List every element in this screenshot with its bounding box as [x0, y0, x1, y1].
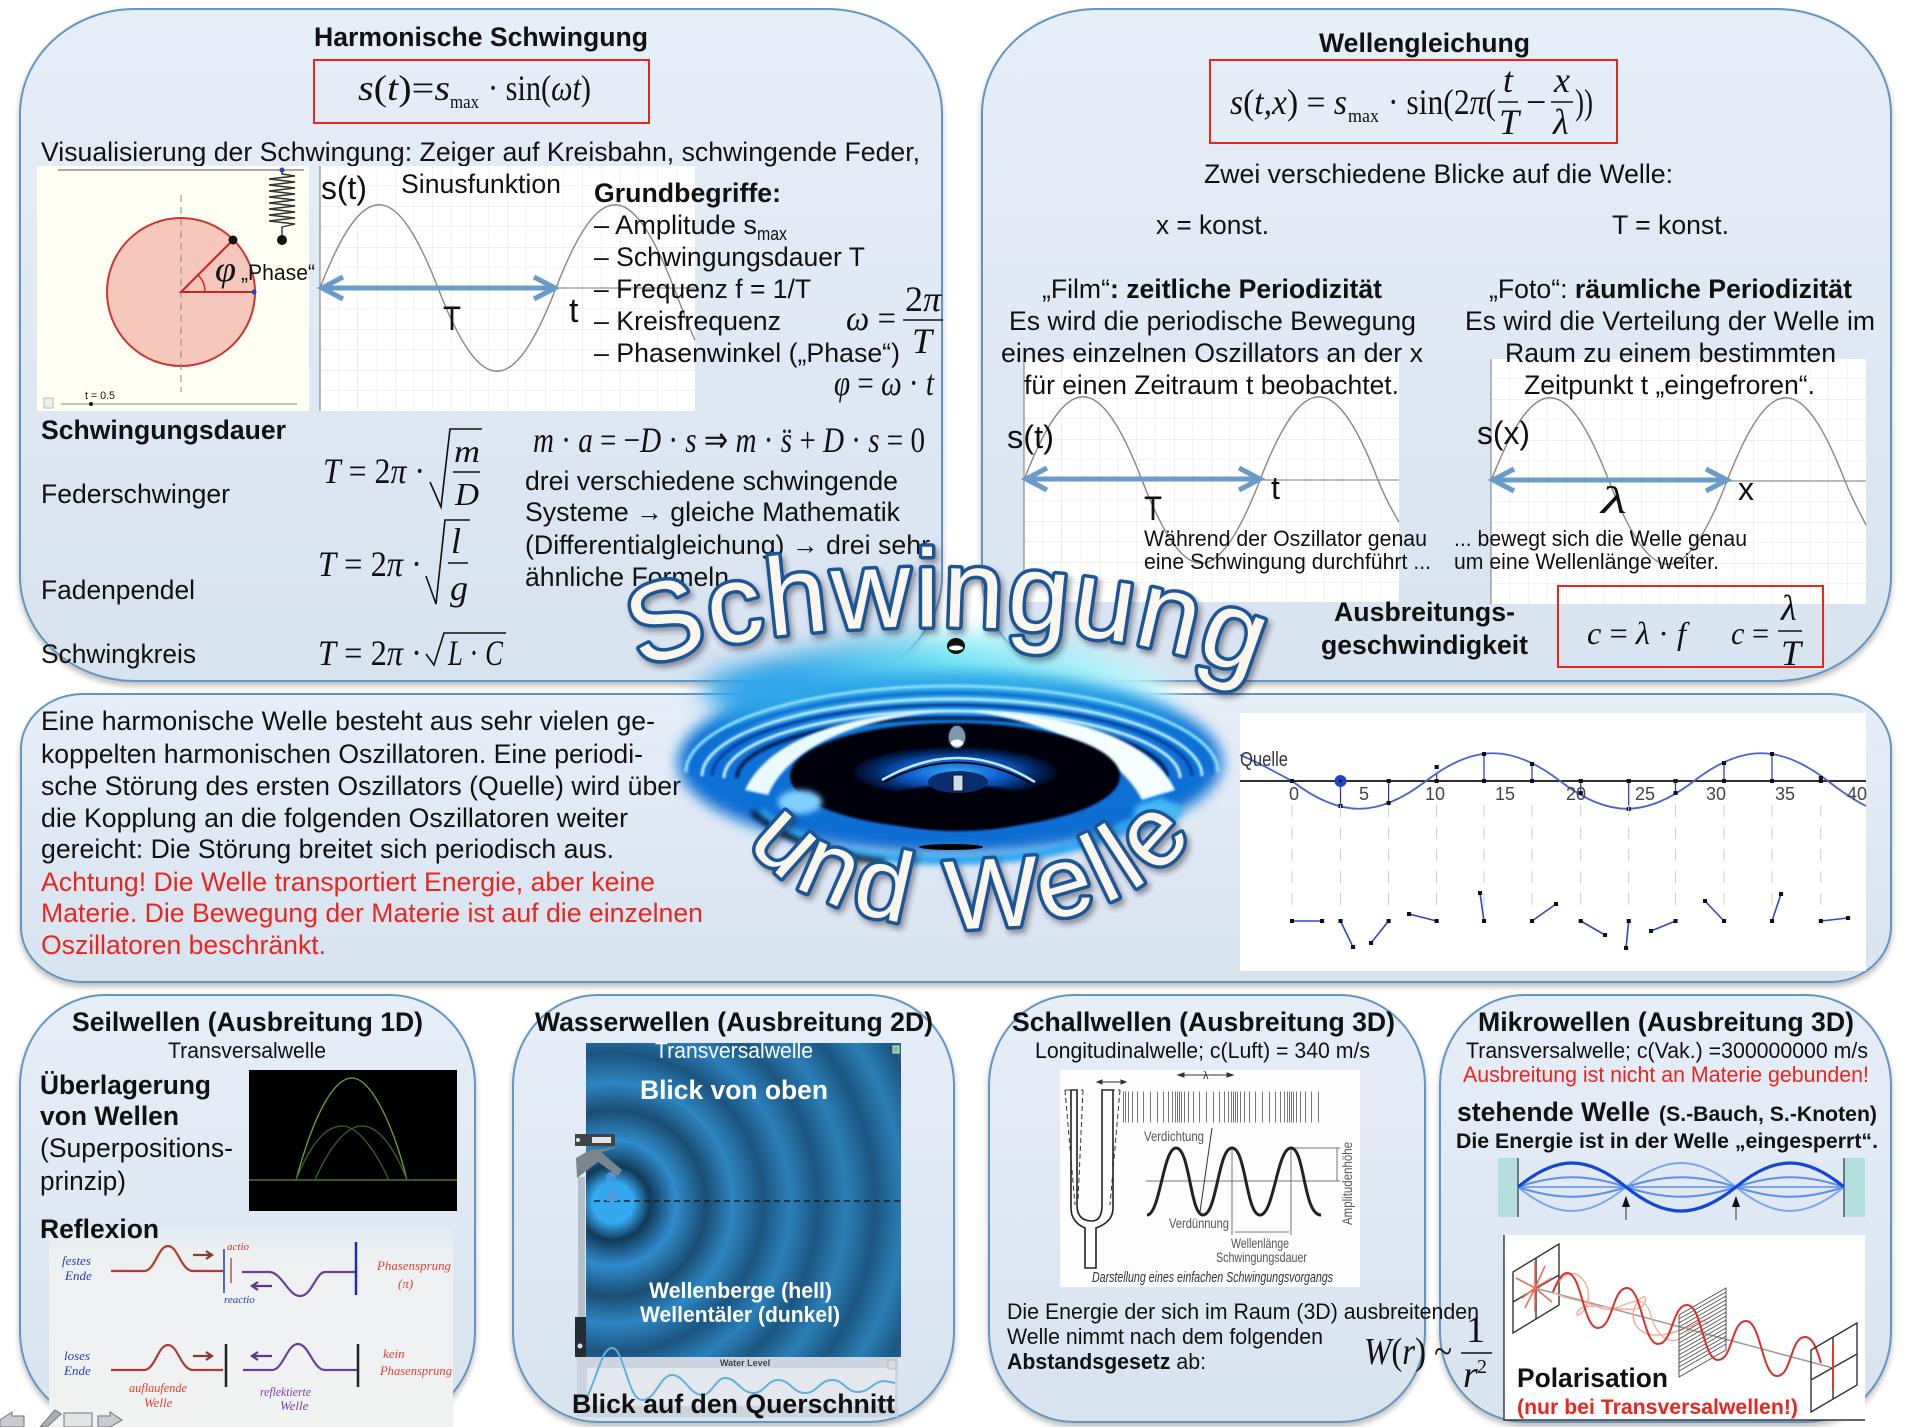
warning text: Ausbreitung ist nicht an Materie gebunden!: [1463, 1062, 1869, 1087]
text block: inverse square law: Welle nimmt nach dem folgenden: [1007, 1324, 1323, 1349]
formula box: wave speed: c =: [1731, 615, 1769, 651]
chart: wave in space: [1491, 359, 1866, 604]
chart: sine function: Sinusfunktion: [401, 169, 561, 199]
text block: superposition: (Superpositions-: [40, 1133, 233, 1163]
diagram: hand-drawn reflection: kein: [383, 1346, 405, 1361]
axis labels: photo chart: x: [1738, 471, 1754, 507]
diagram: hand-drawn reflection: Welle: [280, 1398, 309, 1413]
row: free end: [111, 1344, 358, 1387]
text block: explanation: sche Störung des ersten Oszillators (Quelle) wird über: [41, 771, 681, 801]
panel: Schallwellen: [989, 995, 1425, 1422]
text: energy locked: Die Energie ist in der Welle „eingesperrt“.: [1456, 1130, 1878, 1153]
subheading: Transversalwelle; c(Vak.) =300000000 m/s: [1466, 1038, 1868, 1063]
text block: three systems: ähnliche Formeln: [525, 562, 729, 592]
panel: Wasserwellen: [513, 995, 954, 1422]
centre splash: [853, 747, 1057, 797]
chart: water level: Water Level: [720, 1358, 770, 1368]
heading: stehende Welle: (S.-Bauch, S.-Knoten): [1659, 1103, 1877, 1126]
heading: Schallwellen (Ausbreitung 3D): [1012, 1007, 1395, 1037]
axis labels: [1289, 784, 1867, 804]
icon: tuning fork: [1071, 1090, 1113, 1268]
title: und Welle: [751, 807, 1194, 940]
formula box: wave equation: [1210, 60, 1617, 143]
text block: three systems: (Differentialgleichung) → drei sehr: [525, 530, 930, 560]
diagram: rotating pointer and spring: φ: [215, 249, 236, 289]
axis labels: 10: [1425, 784, 1445, 804]
bright crescents: [745, 711, 945, 795]
diagram: hand-drawn reflection: (π): [398, 1276, 413, 1291]
text: visualisation intro: Visualisierung der Schwingung: Zeiger auf Kreisbahn, schwingende Feder,: [41, 137, 920, 167]
diagram: tuning fork and sound wave: λ: [1203, 1070, 1209, 1082]
simulation: ripple tank top view: [575, 1043, 901, 1357]
heading: Wasserwellen (Ausbreitung 2D): [535, 1007, 933, 1037]
formula: angular frequency: [846, 279, 943, 361]
text block: Grundbegriffe: – Kreisfrequenz: [594, 306, 781, 336]
axis labels: 40: [1847, 784, 1867, 804]
formula box: wave equation: max: [1348, 106, 1379, 127]
axis labels: photo chart: [1477, 415, 1754, 522]
formula: LC circuit period: L · C: [447, 633, 504, 673]
diagram: rotating pointer and spring: t = 0.5: [85, 390, 115, 402]
diagram: hand-drawn reflection: Ende: [63, 1363, 91, 1378]
chart: sine function: [320, 166, 695, 411]
heading: stehende Welle: stehende Welle: [1457, 1097, 1650, 1127]
text block: warning: Oszillatoren beschränkt.: [41, 930, 326, 960]
arrow: wavelength: [1493, 469, 1727, 491]
panel: Wellengleichung: [982, 9, 1891, 681]
icons: presentation controls: [0, 1410, 122, 1427]
droplets: [948, 725, 966, 749]
icon: spring: [269, 170, 295, 236]
caption: wave: ... bewegt sich die Welle genau: [1454, 526, 1747, 551]
chart: water level: [577, 1348, 898, 1417]
formula: spring period: D: [454, 476, 479, 512]
formula: spring period: [323, 429, 482, 512]
diagram: hand-drawn reflection: actio: [227, 1241, 249, 1253]
formula: angular frequency: 2π: [905, 279, 942, 319]
formula: spring period: m: [454, 433, 480, 469]
formula box: wave speed: c = λ · f: [1587, 615, 1690, 651]
formula: inverse square law: 2: [1477, 1356, 1487, 1378]
diagram: tuning fork and sound wave: Verdichtung: [1144, 1128, 1204, 1144]
formula: inverse square law: 1: [1466, 1309, 1485, 1351]
diagram: hand-drawn reflection: [49, 1228, 453, 1427]
caption: wave: [1454, 526, 1747, 574]
formula box: harmonic oscillation: max: [450, 92, 479, 113]
text block: superposition: Überlagerung: [40, 1070, 211, 1100]
label: crests and troughs: Wellenberge (hell): [649, 1278, 832, 1303]
formula: inverse square law: r: [1463, 1354, 1478, 1396]
diagram: rotating pointer and spring: „Phase“: [241, 260, 315, 285]
diagram: standing wave: [1498, 1158, 1865, 1220]
formula box: wave equation: −: [1526, 82, 1546, 122]
text block: Film: [1001, 274, 1423, 400]
axis labels: photo chart: s(x): [1477, 415, 1530, 451]
diagram: hand-drawn reflection: Phasensprung: [379, 1363, 452, 1378]
diagram: tuning fork and sound wave: [1060, 1070, 1360, 1287]
formula: inverse square law: [1364, 1309, 1492, 1396]
chart: sine function: T: [443, 300, 461, 338]
arrow: period T: [322, 277, 555, 299]
chart: sine function: s(t): [321, 170, 367, 206]
formula box: harmonic oscillation: [314, 60, 649, 123]
axis labels: 5: [1359, 784, 1369, 804]
text block: three systems: drei verschiedene schwingende: [525, 466, 898, 496]
formula: spring period: T = 2π ·: [323, 451, 425, 491]
diagram: tuning fork and sound wave: Wellenlänge: [1231, 1235, 1289, 1251]
text block: Foto: Raum zu einem bestimmten: [1505, 338, 1836, 368]
caption: oscillator: Während der Oszillator genau: [1144, 526, 1427, 551]
chart: coupled oscillators: Quelle: [1240, 749, 1288, 771]
panel: Harmonische Schwingung: [20, 9, 943, 681]
diagram: hand-drawn reflection: auflaufende: [129, 1380, 187, 1395]
icon: faucet: [576, 1147, 622, 1178]
chart: oscillator over time: [1024, 359, 1399, 602]
formula: inverse square law: W(r) ~: [1364, 1331, 1452, 1373]
formula box: wave equation: T: [1499, 102, 1522, 142]
text block: explanation: Eine harmonische Welle besteht aus sehr vielen ge-: [41, 706, 655, 736]
formula box: wave equation: )): [1575, 82, 1593, 122]
diagram: tuning fork and sound wave: Darstellung eines einfachen Schwingungsvorgangs: [1092, 1269, 1333, 1286]
diagram: hand-drawn reflection: loses: [64, 1348, 90, 1363]
text block: three systems: [525, 466, 930, 592]
diagram: hand-drawn reflection: reflektierte: [260, 1384, 311, 1399]
title: und Welle: und Welle: [751, 807, 1194, 940]
text block: Film: „Film“: zeitliche Periodizität: [1042, 274, 1382, 304]
text block: Foto: Es wird die Verteilung der Welle im: [1465, 306, 1875, 336]
label: x konstant: x = konst.: [1156, 210, 1269, 240]
formula: differential equation: m · a = −D · s ⇒ m · s̈ + D · s = 0: [533, 420, 925, 460]
formula box: wave equation: · sin(2π(: [1388, 82, 1496, 122]
text block: Grundbegriffe: – Schwingungsdauer T: [594, 242, 865, 272]
label: Blick auf den Querschnitt: Blick auf den Querschnitt: [572, 1389, 895, 1419]
label: T konstant: T = konst.: [1612, 210, 1729, 240]
heading: Schwingungsdauer: Schwingungsdauer: [41, 415, 286, 445]
panel: Seilwellen: [20, 995, 475, 1427]
caption: oscillator: [1144, 526, 1431, 574]
text block: explanation: gereicht: Die Störung breitet sich periodisch aus.: [41, 834, 614, 864]
text block: explanation: die Kopplung an die folgenden Oszillatoren weiter: [41, 803, 628, 833]
text block: Foto: [1465, 274, 1875, 400]
text block: inverse square law: [1007, 1299, 1479, 1374]
text block: warning: [41, 867, 703, 960]
text block: Grundbegriffe: [594, 178, 900, 368]
formula: phase: φ = ω · t: [834, 363, 935, 403]
formula: pendulum period: g: [450, 568, 468, 608]
subheading: Transversalwelle: [655, 1038, 813, 1063]
arrow: period: [1026, 468, 1260, 490]
text block: inverse square law: Die Energie der sich im Raum (3D) ausbreitenden: [1007, 1299, 1479, 1324]
label: Federschwinger: Federschwinger: [41, 479, 230, 509]
text block: superposition: [40, 1070, 233, 1196]
text block: Film: eines einzelnen Oszillators an der x: [1001, 338, 1423, 368]
axis labels: film chart: T: [1144, 490, 1162, 528]
label: crests and troughs: [640, 1278, 840, 1327]
text block: superposition: prinzip): [40, 1166, 126, 1196]
formula box: wave equation: t: [1503, 60, 1514, 100]
chart: coupled oscillators: [1240, 713, 1867, 971]
axis labels: film chart: t: [1271, 470, 1280, 506]
formula: angular frequency: T: [912, 321, 935, 361]
heading: Seilwellen (Ausbreitung 1D): [72, 1007, 423, 1037]
heading: Reflexion: Reflexion: [40, 1214, 159, 1244]
formula box: harmonic oscillation: · sin(ωt): [488, 68, 591, 108]
diagram: rotating pointer and spring: [37, 166, 315, 411]
diagram: tuning fork and sound wave: Schwingungsdauer: [1216, 1249, 1307, 1265]
axis labels: 20: [1566, 784, 1586, 804]
polarizer grid: [1679, 1288, 1726, 1377]
diagram: hand-drawn reflection: reactio: [224, 1294, 255, 1306]
label: Ausbreitungsgeschwindigkeit: Ausbreitungs-: [1334, 597, 1515, 627]
text block: warning: Materie. Die Bewegung der Materie ist auf die einzelnen: [41, 898, 703, 928]
panel: harmonische Welle: [21, 694, 1891, 982]
axis labels: film chart: s(t): [1007, 419, 1054, 455]
formula: pendulum period: l: [451, 521, 461, 561]
heading: Harmonische Schwingung: Harmonische Schwingung: [314, 22, 648, 52]
chart: superposition of pulses: [249, 1070, 457, 1211]
label: Fadenpendel: Fadenpendel: [41, 575, 195, 605]
formula box: wave equation: λ: [1552, 102, 1569, 142]
text: two views on the wave: Zwei verschiedene Blicke auf die Welle:: [1204, 159, 1673, 189]
text block: Grundbegriffe: – Frequenz f = 1/T: [594, 274, 811, 304]
text block: explanation: koppelten harmonischen Oszillatoren. Eine periodi-: [41, 739, 643, 769]
text block: Film: Es wird die periodische Bewegung: [1009, 306, 1416, 336]
formula box: harmonic oscillation: s(t)=s: [358, 68, 450, 108]
heading: stehende Welle: [1457, 1097, 1877, 1127]
text block: Grundbegriffe: max: [757, 224, 787, 244]
text block: Grundbegriffe: – Amplitude s: [594, 210, 757, 240]
label: Blick von oben: Blick von oben: [640, 1075, 828, 1105]
panel: Mikrowellen: [1440, 995, 1891, 1422]
subheading: Transversalwelle: [168, 1038, 326, 1063]
axis labels: 25: [1635, 784, 1655, 804]
formula box: wave speed: T: [1781, 633, 1804, 673]
axis labels: 15: [1495, 784, 1515, 804]
caption: oscillator: eine Schwingung durchführt ...: [1144, 549, 1431, 574]
text block: Film: für einen Zeitraum t beobachtet.: [1024, 370, 1399, 400]
text block: inverse square law: Abstandsgesetz ab:: [1007, 1349, 1206, 1374]
axis labels: film chart: [1007, 419, 1280, 528]
formula box: wave equation: s(t,x) = s: [1230, 82, 1347, 122]
formula: LC circuit period: T = 2π ·: [318, 633, 422, 673]
formula: pendulum period: [318, 520, 470, 608]
diagram: hand-drawn reflection: Welle: [144, 1395, 173, 1410]
axis labels: 0: [1289, 784, 1299, 804]
diagram: hand-drawn reflection: Phasensprung: [376, 1258, 451, 1273]
dumbbells: oscillator states: [1292, 893, 1848, 948]
text block: warning: Achtung! Die Welle transportiert Energie, aber keine: [41, 867, 655, 897]
label: Polarisation: Polarisation: [1517, 1363, 1668, 1393]
label: Ausbreitungsgeschwindigkeit: [1321, 597, 1528, 660]
diagram: hand-drawn reflection: festes: [62, 1253, 91, 1268]
arrows: nodes: [1626, 1197, 1736, 1220]
formula: angular frequency: ω =: [846, 298, 896, 338]
formula: pendulum period: T = 2π ·: [318, 544, 422, 584]
text block: three systems: Systeme → gleiche Mathematik: [525, 497, 900, 527]
subheading: Longitudinalwelle; c(Luft) = 340 m/s: [1035, 1038, 1370, 1063]
text block: Foto: „Foto“: räumliche Periodizität: [1489, 274, 1852, 304]
diagram: polarisation: [1504, 1235, 1865, 1420]
text block: explanation: [41, 706, 681, 864]
text block: Grundbegriffe: – Phasenwinkel („Phase“): [594, 338, 900, 368]
text block: Grundbegriffe: Grundbegriffe:: [594, 178, 781, 208]
title: Schwingung: Schwingung: [626, 543, 1274, 702]
axis labels: 30: [1706, 784, 1726, 804]
formula: LC circuit period: [318, 633, 506, 673]
ripple rings: [686, 686, 1218, 778]
text block: Foto: Zeitpunkt t „eingefroren“.: [1524, 370, 1815, 400]
axis labels: 35: [1775, 784, 1795, 804]
diagram: tuning fork and sound wave: Verdünnung: [1169, 1215, 1229, 1231]
caption: wave: um eine Wellenlänge weiter.: [1454, 549, 1719, 574]
heading: Mikrowellen (Ausbreitung 3D): [1478, 1007, 1854, 1037]
label: crests and troughs: Wellentäler (dunkel): [640, 1302, 840, 1327]
row: fixed end: [111, 1242, 356, 1296]
label: Schwingkreis: Schwingkreis: [41, 639, 196, 669]
formula box: wave equation: x: [1553, 60, 1570, 100]
formula box: wave speed: [1558, 586, 1823, 673]
axis labels: photo chart: λ: [1599, 480, 1627, 522]
label: transversal only: (nur bei Transversalwellen!): [1517, 1396, 1798, 1419]
heading: Wellengleichung: Wellengleichung: [1319, 28, 1530, 58]
formula box: wave speed: λ: [1780, 588, 1797, 628]
chart: sine function: t: [569, 292, 579, 330]
text block: superposition: von Wellen: [40, 1101, 179, 1131]
image: water drop splash: [678, 636, 1222, 862]
label: Ausbreitungsgeschwindigkeit: geschwindigkeit: [1321, 630, 1528, 660]
diagram: tuning fork and sound wave: Amplitudenhöhe: [1339, 1142, 1355, 1225]
dark basin: [790, 723, 1120, 829]
diagram: hand-drawn reflection: Ende: [64, 1268, 92, 1283]
